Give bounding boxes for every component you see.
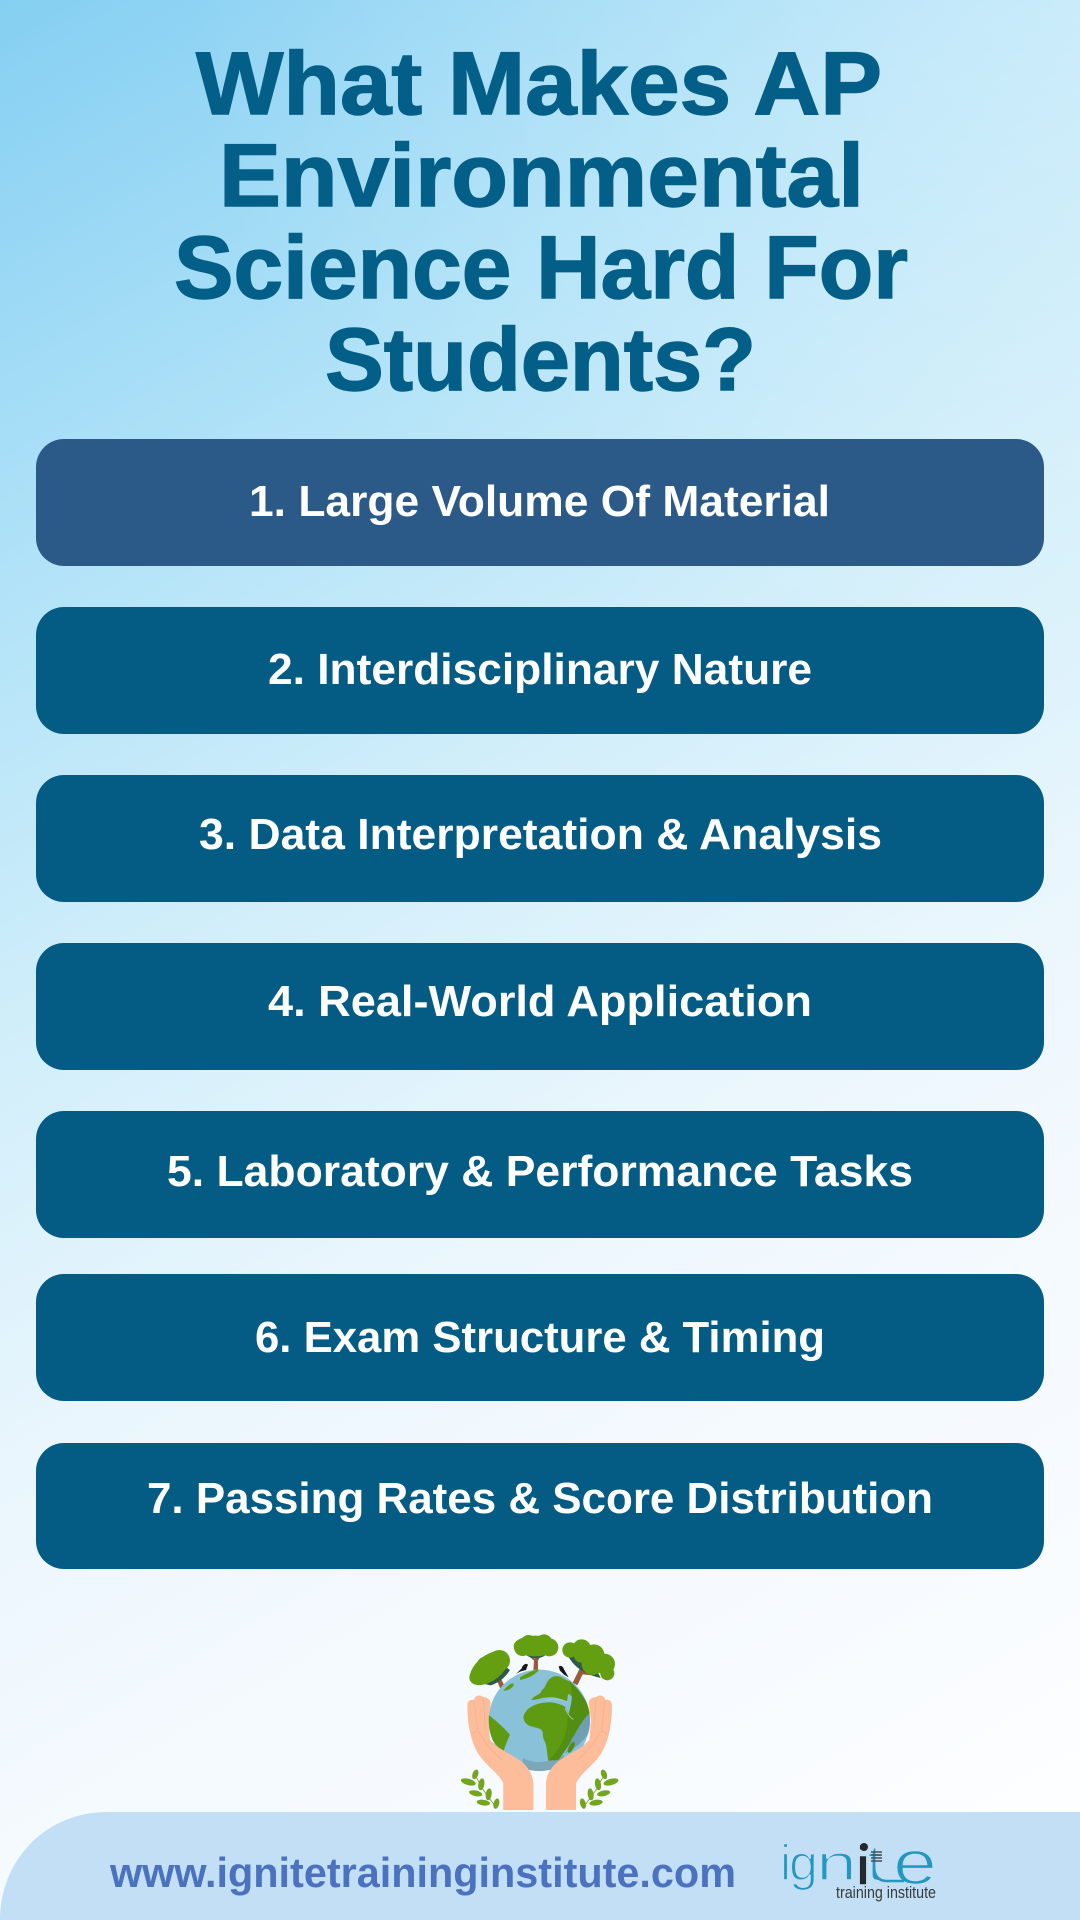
panel: item 7: 7. Passing Rates & Score Distribution <box>147 1474 933 1523</box>
panel: item 1: 1. Large Volume Of Material <box>249 477 830 526</box>
website url: www.ignitetraininginstitute.com <box>109 1849 736 1896</box>
title: What Makes AP <box>196 33 882 133</box>
icon: birds <box>516 1664 569 1677</box>
title: Students? <box>325 309 756 409</box>
panel: footer band <box>0 1812 1080 1920</box>
logo: ignite training institute: n <box>816 1835 857 1891</box>
icon: hands front <box>473 1732 607 1810</box>
icon: centre tree <box>514 1634 558 1671</box>
logo: ignite training institute: training institute <box>836 1883 936 1902</box>
logo: ignite training institute <box>780 1829 937 1902</box>
panel: item 5: 5. Laboratory & Performance Tasks <box>167 1147 913 1196</box>
logo: ignite training institute: e <box>893 1829 937 1898</box>
icon: left tree <box>464 1644 515 1692</box>
panel: item 5 <box>36 1111 1044 1238</box>
panel: item 6 <box>36 1274 1044 1401</box>
panel: item 4: 4. Real-World Application <box>268 977 812 1026</box>
title: Environmental <box>219 125 864 225</box>
panel: item 6: 6. Exam Structure & Timing <box>255 1313 825 1362</box>
panel: item 1 <box>36 439 1044 566</box>
panel: item 2: 2. Interdisciplinary Nature <box>268 645 812 694</box>
logo: ignite training institute: g <box>789 1835 818 1891</box>
icon: right tree <box>562 1639 615 1685</box>
panel: item 3: 3. Data Interpretation & Analysis <box>199 810 882 859</box>
logo: ignite training institute: i <box>855 1834 871 1897</box>
panel: item 2 <box>36 607 1044 734</box>
icon: hands holding globe with trees <box>460 1634 619 1810</box>
icon: globe <box>488 1669 592 1773</box>
logo: ignite training institute: t <box>868 1835 882 1891</box>
icon: laurel leaves <box>460 1769 619 1810</box>
icon: hands back <box>467 1696 612 1810</box>
logo: ignite training institute: i <box>780 1835 791 1891</box>
title: Science Hard For <box>174 217 908 317</box>
panel: item 7 <box>36 1443 1044 1569</box>
title <box>174 33 908 409</box>
panel: item 4 <box>36 943 1044 1070</box>
panel: item 3 <box>36 775 1044 902</box>
